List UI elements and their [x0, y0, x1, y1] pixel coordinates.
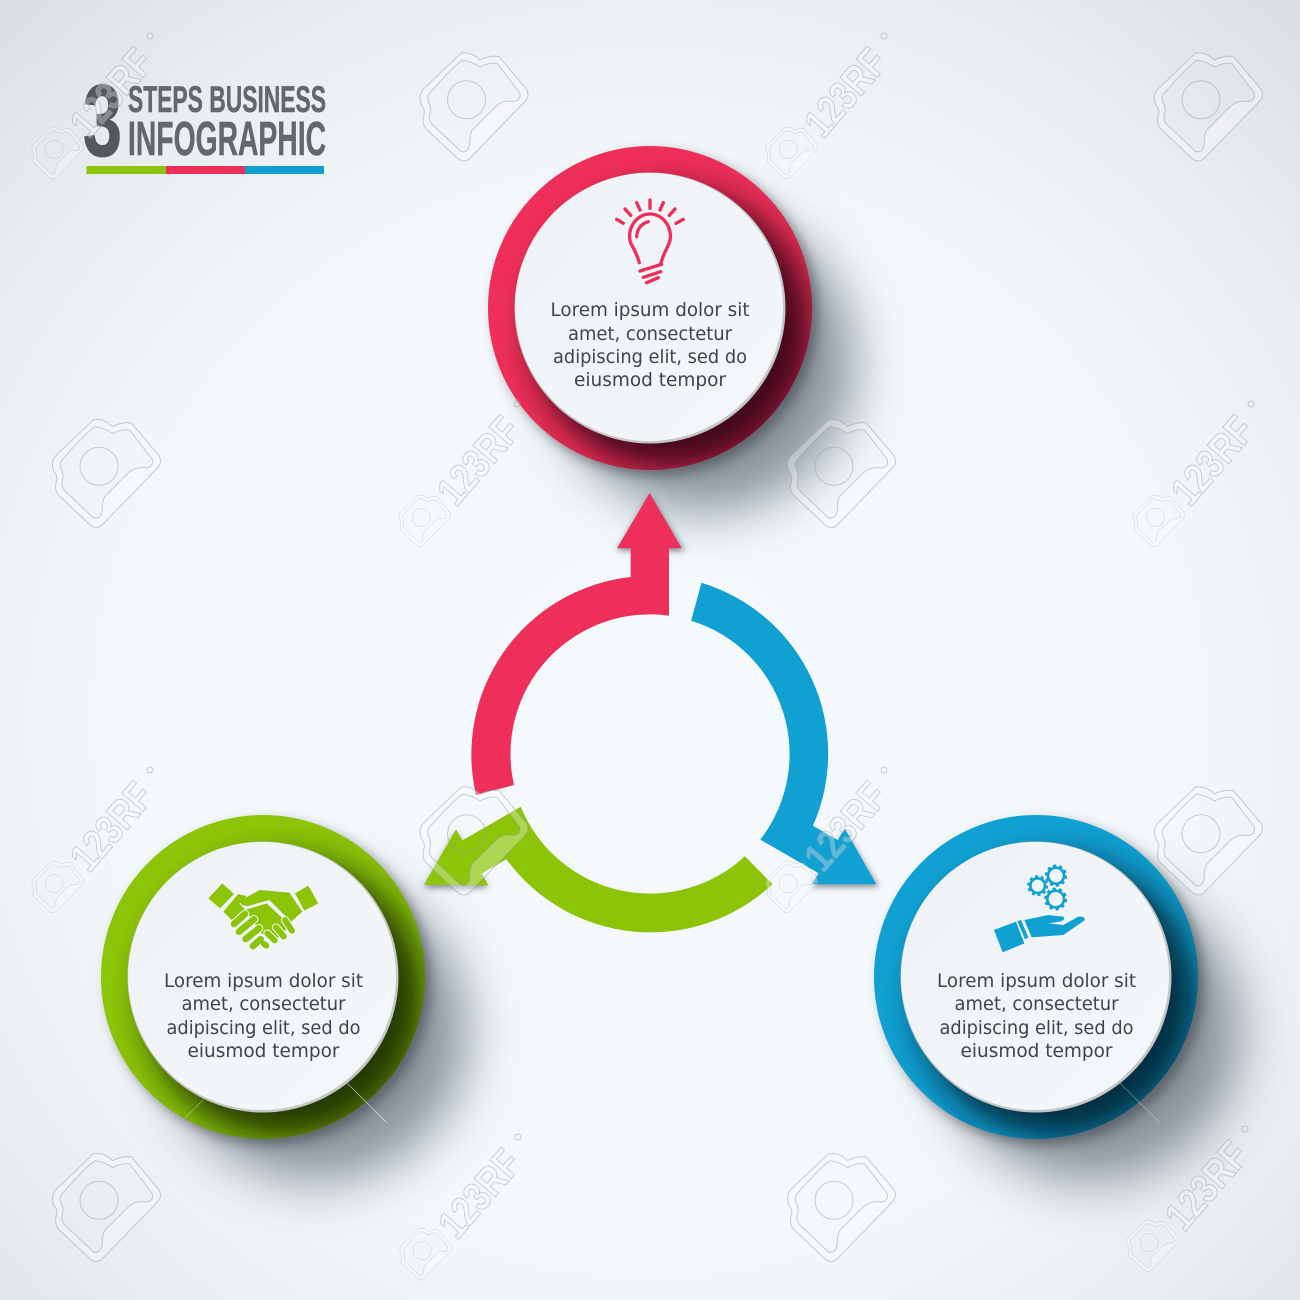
- text block: blue step: [937, 970, 1136, 1062]
- icon: light bulb: [617, 200, 683, 283]
- text block: red step: adipiscing elit, sed do: [553, 346, 747, 368]
- watermark stamps: 123RF: [429, 1141, 530, 1247]
- cast shadow: green circle: [107, 821, 467, 1181]
- watermark stamps: 123RF: [1156, 1133, 1257, 1239]
- central cycle of arrows: [408, 493, 965, 1039]
- text block: green step: adipiscing elit, sed do: [166, 1017, 360, 1039]
- ring: blue: [874, 815, 1198, 1139]
- watermark stamps: 123RF: [61, 40, 162, 146]
- arrow: blue: [599, 579, 965, 912]
- title numeral 3: 3: [83, 64, 122, 178]
- title line: steps business: STEPS BUSINESS: [128, 79, 326, 120]
- text block: green step: amet, consectetur: [182, 993, 346, 1015]
- watermark stamps: 123RF: [1162, 408, 1263, 514]
- text block: green step: eiusmod tempor: [188, 1040, 340, 1062]
- text block: green step: [164, 970, 363, 1062]
- watermark stamps: 123RF: [795, 40, 896, 146]
- text block: blue step: adipiscing elit, sed do: [940, 1017, 1134, 1039]
- cast shadow: blue circle: [880, 821, 1240, 1181]
- text block: red step: amet, consectetur: [568, 323, 732, 345]
- text block: red step: [550, 299, 750, 391]
- panel: red step circle: [488, 146, 854, 512]
- inner disc: blue: [900, 842, 1172, 1112]
- title block: [83, 64, 326, 178]
- icon: handshake: [208, 883, 318, 946]
- watermark stamps: 123RF: [795, 774, 896, 880]
- icon: hand holding gears: [994, 866, 1085, 952]
- ring: red: [488, 146, 812, 470]
- arrowhead shadows: [424, 496, 879, 888]
- text block: red step: Lorem ipsum dolor sit: [550, 299, 750, 321]
- text block: blue step: Lorem ipsum dolor sit: [937, 970, 1136, 992]
- inner disc: red: [514, 172, 786, 444]
- text block: red step: eiusmod tempor: [574, 369, 726, 391]
- text block: blue step: eiusmod tempor: [960, 1040, 1113, 1062]
- arrow: green: [408, 706, 775, 1039]
- arrow: red: [471, 493, 682, 795]
- panel: green step circle: [101, 815, 467, 1181]
- text block: blue step: amet, consectetur: [954, 993, 1119, 1015]
- watermark stamps: 123RF: [428, 408, 529, 514]
- inner disc: green: [128, 842, 398, 1112]
- cast shadow: red circle: [494, 152, 854, 512]
- text block: green step: Lorem ipsum dolor sit: [164, 970, 363, 992]
- title colour bar: [86, 166, 324, 174]
- panel: blue step circle: [874, 815, 1240, 1181]
- title line: infographic: INFOGRAPHIC: [128, 113, 326, 166]
- watermark stamps: 123RF: [61, 774, 162, 880]
- ring: green: [101, 815, 425, 1139]
